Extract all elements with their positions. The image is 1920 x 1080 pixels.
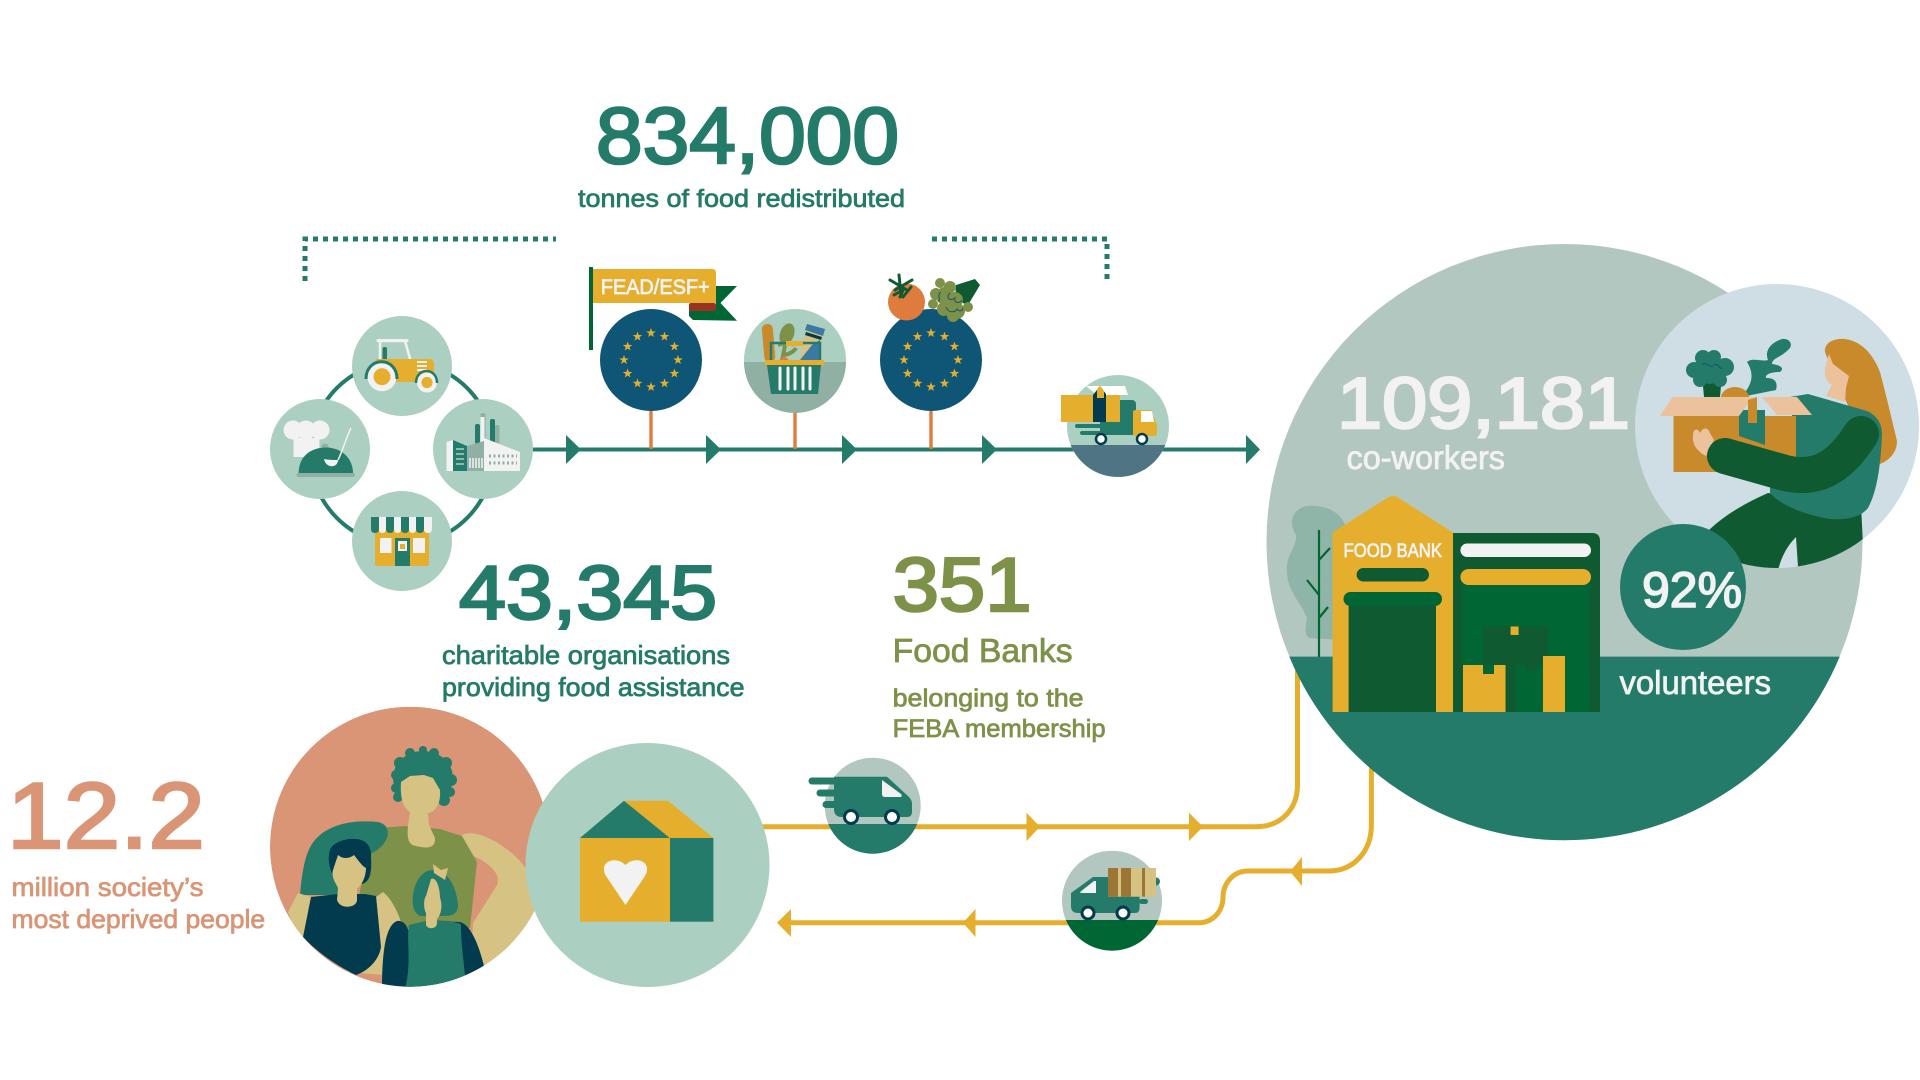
icon: van [812,758,921,854]
food box [1660,397,1812,472]
illustration: food bank building [1333,496,1600,712]
stat: co-workers: co-workers [1346,439,1505,476]
right child shirt [382,921,484,990]
panel: food bank circle [1266,244,1862,840]
illustration: family [270,707,550,990]
tall person hair [391,746,457,806]
headline: 834,000 tonnes: 834,000 [596,91,899,180]
stat: deprived people: million society’s [12,872,203,902]
supply ring [310,361,494,545]
stat: charitable organisations: 43,345 [459,551,717,636]
main timeline arrow [533,410,1260,464]
icon: tractor [352,316,452,416]
stat: food banks: belonging to the [893,684,1084,712]
icon: factory [433,399,533,499]
stat: food banks [893,543,1106,743]
teal arm [300,821,388,895]
volunteer body [1770,394,1882,519]
stat: co-workers: 109,181 [1337,364,1630,444]
stat: food banks: FEBA membership [893,715,1106,743]
icon: delivery truck [1061,375,1169,477]
icon: shop [352,491,452,591]
stat: volunteers: 92% [1642,562,1742,618]
stat: volunteers [1620,524,1771,701]
gold arrow: returning goods [777,760,1371,937]
stat: deprived people: 12.2 [7,763,205,868]
volunteer hand [1693,428,1714,456]
dotted bracket right [932,239,1107,281]
icon: shopping basket [744,309,846,413]
right child face [424,879,441,928]
tall person face [401,775,440,848]
headline: 834,000 tonnes: tonnes of food redistributed [578,185,905,213]
flag label: FEAD/ESF+ [601,276,710,299]
left child arms [288,892,401,975]
stat: deprived people: most deprived people [12,904,265,934]
left child face [332,855,366,907]
stat: food banks: Food Banks [893,632,1073,669]
tan arm [461,833,534,973]
volunteer legs [1700,493,1863,570]
right child hair [413,870,458,916]
vegetables [1686,339,1791,409]
illustration: charity house [526,743,770,987]
stat: co-workers [1337,364,1630,476]
building sign: FOOD BANK [1344,541,1442,562]
left child hair [329,839,371,884]
stat: volunteers: volunteers [1620,664,1771,701]
illustration: tree [1287,506,1346,657]
dotted bracket left [305,239,556,281]
stat: deprived people [7,763,265,934]
torso [358,826,477,928]
stat: food banks: 351 [893,543,1032,628]
icon: catering [270,399,370,499]
headline: 834,000 tonnes [578,91,905,213]
volunteer arm [1725,434,1861,475]
stat: charitable organisations: charitable organisations [442,640,730,670]
icon: EU flag with FEAD banner [589,267,737,411]
stat: charitable organisations: providing food assistance [442,672,744,702]
illustration: volunteer with food box [1635,284,1919,570]
icon: returning truck [1062,851,1162,951]
left child shirt [303,894,381,975]
gold arrow: food bank to charities [760,660,1298,841]
stat: charitable organisations [442,551,744,702]
icon: heart [604,860,647,905]
volunteer hair [1825,339,1897,464]
icon: EU flag with vegetables [880,275,982,411]
volunteer face [1825,354,1849,402]
